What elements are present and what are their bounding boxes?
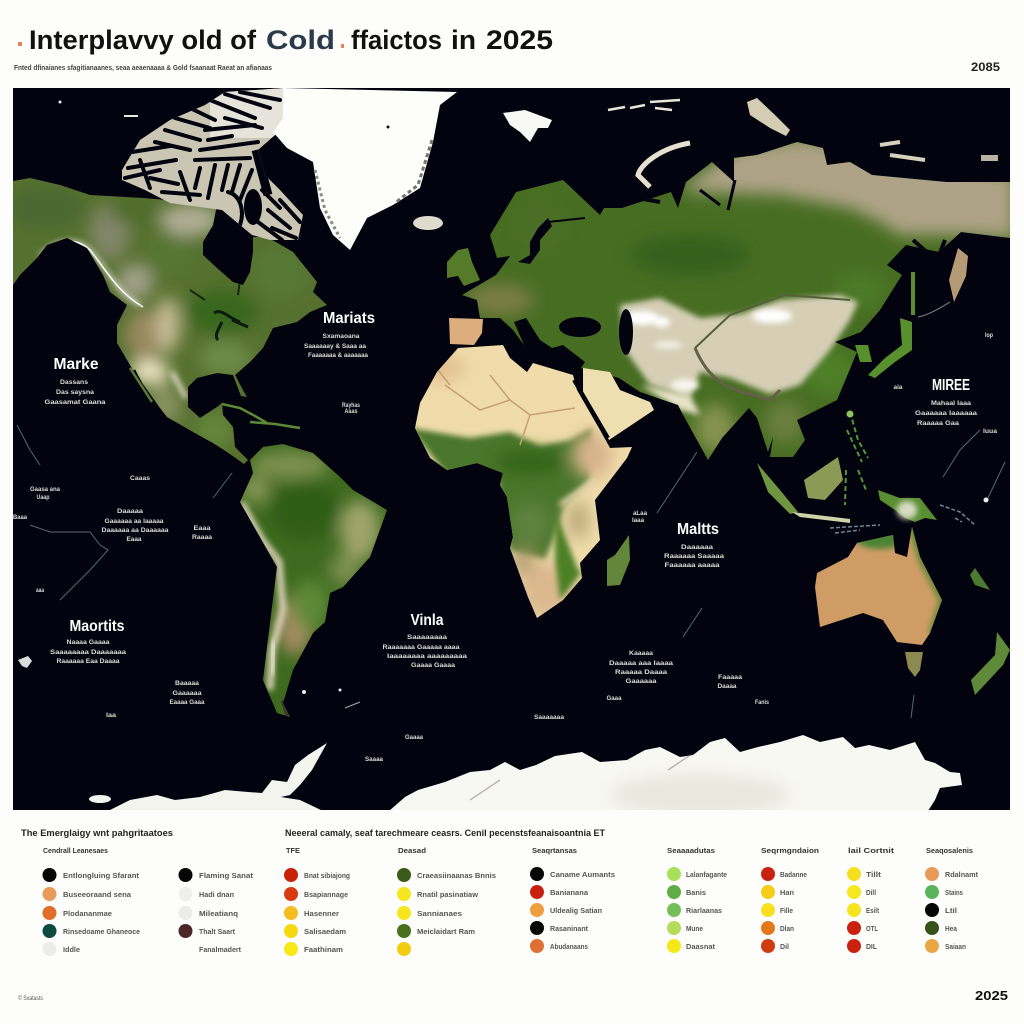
map label: maortits (50, 618, 126, 665)
map label: mariats (304, 310, 375, 359)
minor ocean labels (13, 332, 997, 763)
legend column 9: Seaqosalenis (926, 846, 973, 855)
minor ocean labels: Raaaaa Daaaa (615, 669, 667, 676)
map panel (5, 88, 1015, 817)
map label: maortits: Naaaa Gaaaa (66, 639, 110, 646)
arctic islands (124, 98, 998, 187)
iceland (413, 216, 443, 230)
legend column 3: Salisaedam (304, 927, 346, 936)
minor ocean labels: Saaaa (365, 756, 383, 763)
tasmania and new zealand (905, 568, 1010, 695)
legend column 5 (530, 846, 615, 953)
map label: marke: Marke (54, 356, 99, 373)
map label: vinla: Gaaaa Gaaaa (411, 662, 455, 669)
legend column 7: Dlan (780, 924, 794, 933)
minor ocean labels: Rayhas (342, 402, 360, 409)
minor ocean labels: Gaaaaaa aa Iaaaaa (104, 518, 164, 525)
legend column 1 (42, 846, 140, 956)
legend heading left: The Emerglaigy wnt pahgritaatoes (21, 828, 173, 839)
footer credit: © Sxatasts (18, 995, 43, 1002)
legend column 7: Dil (780, 942, 789, 951)
minor ocean labels: Iaaa (632, 517, 644, 524)
map label: maltts (664, 521, 724, 569)
minor ocean labels: Gaaaaaa (172, 690, 202, 697)
minor ocean labels: Kaaaaa (629, 650, 653, 657)
title: in (451, 25, 476, 55)
continent: australia (815, 527, 942, 645)
legend column 1: Entlongluing Sfarant (63, 871, 140, 880)
legend column 9: Saiaan (945, 942, 966, 951)
map label: maltts: Maltts (677, 521, 719, 538)
title: 2025 (486, 25, 553, 55)
southeast asia islands (757, 410, 975, 533)
legend column 9 (925, 846, 978, 953)
minor ocean labels: Daaaaaa aa Daaaaaa (102, 527, 169, 534)
legend column 2: Hadi dnan (199, 890, 234, 899)
legend column 8: OTL (866, 924, 878, 933)
minor ocean labels: Daaaaa (117, 508, 143, 515)
legend column 3: TFE (286, 846, 300, 855)
map label: mariats: Mariats (323, 310, 375, 327)
map label: vinla (382, 612, 467, 669)
subtitle: Fnted dfinaianes sfagitianaanes, seaa aeaenaaaa & Gold fsaanaat Raeat an afianaas (14, 65, 272, 72)
legend column 8: Tillt (866, 870, 882, 879)
greenland (273, 88, 457, 250)
minor ocean labels: aia (894, 384, 903, 391)
continent: north america (5, 170, 333, 470)
continent: south america (240, 444, 387, 717)
legend column 7: Fille (780, 906, 793, 915)
legend column 4: Meiclaidart Ram (417, 927, 475, 936)
legend column 9: Rdalnamt (945, 870, 978, 879)
legend column 3: Bnat sibiajong (304, 871, 350, 880)
title (18, 25, 553, 55)
legend column 7: Seqrmgndaion (761, 846, 819, 855)
legend column 9: Hea (945, 924, 958, 933)
minor ocean labels: Faaaaa (718, 674, 742, 681)
legend column 2 (178, 868, 254, 954)
legend column 8: DIL (866, 942, 877, 951)
map label: marke: Das saysna (56, 389, 94, 396)
legend column 1: Iddle (63, 945, 80, 954)
minor ocean labels: aaa (36, 587, 44, 594)
legend column 5: Seaqrtansas (532, 846, 577, 855)
legend column 5: Abudanaans (550, 942, 588, 951)
baja dark strip (133, 369, 143, 384)
continent: eurasia (450, 130, 1015, 470)
spain (449, 318, 483, 345)
minor ocean labels: Gaaa (606, 695, 622, 702)
minor ocean labels: Saaaaaaa (534, 714, 564, 721)
map label: miree: Gaaaaaa Iaaaaaa (915, 410, 977, 417)
legend column 3: Hasenner (304, 909, 339, 918)
legend column 4: Rnatil pasinatiaw (417, 890, 478, 899)
legend column 1: Plodananmae (63, 909, 112, 918)
legend column 8: Esilt (866, 906, 879, 915)
minor ocean labels: Iop (985, 332, 993, 339)
pacific and ocean island chains (17, 100, 1005, 718)
minor ocean labels: Iaa (106, 712, 116, 719)
continent: africa (410, 340, 640, 625)
legend column 6: Mune (686, 924, 703, 933)
legend column 6: Banis (686, 888, 706, 897)
map label: vinla: Vinla (410, 612, 444, 629)
legend column 7 (761, 846, 819, 953)
minor ocean labels: Raaaa (192, 534, 212, 541)
map label: miree: MIREE (932, 377, 970, 394)
minor ocean labels: aLaa (633, 510, 647, 517)
minor ocean labels: Eaaa (126, 536, 142, 543)
title: Cold (266, 25, 335, 55)
legend column 9: Ltil (945, 906, 957, 915)
map label: marke: Gaasamat Gaana (44, 399, 106, 406)
legend column 6: Seaaaadutas (667, 846, 715, 855)
red sea edge (574, 380, 608, 438)
minor ocean labels: Gaaaaaa (626, 678, 657, 685)
legend column 4: Deasad (398, 846, 426, 855)
legend column 9: Stains (945, 888, 963, 897)
minor ocean labels: luua (983, 428, 997, 435)
minor ocean labels: Aaas (344, 408, 358, 415)
minor ocean labels: Baaaaa (175, 680, 199, 687)
legend column 1: Cendrall Leanesaes (43, 846, 108, 855)
map label: marke (44, 356, 106, 406)
legend column 2: Thalt Saart (199, 927, 235, 936)
legend column 7: Han (780, 888, 794, 897)
legend column 5: Rasaninant (550, 924, 588, 933)
legend column 8: lail Cortnit (848, 846, 895, 855)
kamchatka (949, 248, 968, 302)
legend column 4 (397, 846, 496, 956)
continent: antarctica (89, 735, 962, 810)
legend column 7: Badanne (780, 870, 807, 879)
map label: miree: Mahaal Iaaa (931, 400, 971, 407)
legend column 2: Flaming Sanat (199, 871, 254, 880)
arabia (583, 368, 654, 440)
japan korea sakhalin (855, 272, 950, 378)
minor ocean labels: Gaasa ana (30, 486, 60, 493)
minor ocean labels: Daaaaa aaa Iaaaa (609, 660, 673, 667)
map label: maortits: Saaaaaaaa Daaaaaaa (50, 649, 126, 656)
map label: marke: Dassans (60, 379, 88, 386)
minor ocean labels: Caaas (130, 475, 150, 482)
legend column 6: Riarlaanas (686, 906, 722, 915)
minor ocean labels: Eaaa (194, 525, 211, 532)
legend column 2: Fanalmadert (199, 945, 241, 954)
map label: vinla: Saaaaaaaa (407, 634, 447, 641)
caribbean islands (222, 404, 300, 428)
minor ocean labels: Baaa (13, 514, 27, 521)
map label: miree (915, 377, 977, 427)
madagascar (607, 535, 630, 586)
minor ocean labels: Gaaaa (405, 734, 423, 741)
map label: mariats: Sxamaoana (322, 333, 360, 340)
legend column 8 (847, 846, 895, 953)
map label: maortits: Maortits (70, 618, 125, 635)
map label: vinla: Raaaaaaa Gaaaaa aaaa (382, 644, 460, 651)
minor ocean labels: Uaap (36, 494, 50, 501)
legend column 3: Faathinam (304, 945, 343, 954)
footer year: 2025 (975, 988, 1008, 1003)
legend column 5: Banianana (550, 888, 589, 897)
legend column 1: Rinsedoame Ghaneoce (63, 927, 140, 936)
map label: maltts: Raaaaaa Saaaaa (664, 553, 724, 560)
legend column 8: Dill (866, 888, 876, 897)
minor ocean labels: Fanis (755, 699, 769, 706)
minor ocean labels: Daaaa (718, 683, 737, 690)
map label: maltts: Daaaaaa (681, 544, 713, 551)
legend column 3 (284, 846, 350, 956)
legend column 5: Uldealig Satian (550, 906, 602, 915)
minor ocean labels: Eaaaa Gaaa (170, 699, 205, 706)
legend column 4: Craeasiinaanas Bnnis (417, 871, 496, 880)
legend column 3: Bsapiannage (304, 890, 348, 899)
legend column 2: Mileatianq (199, 909, 238, 918)
year top right: 2085 (971, 62, 1001, 74)
map label: miree: Raaaaa Gaa (917, 420, 959, 427)
title: ffaictos (351, 25, 442, 55)
map label: maltts: Faaaaaa aaaaa (664, 562, 720, 569)
legend column 6: Lalanfagante (686, 870, 727, 879)
legend column 5: Caname Aumants (550, 870, 615, 879)
title: Interplavvy old of (29, 25, 257, 55)
legend column 1: Buseeoraand sena (63, 890, 132, 899)
legend heading right: Neeeral camaly, seaf tarechmeare ceasrs. Cenil pecenstsfeanaisoantnia ET (285, 828, 605, 839)
map label: mariats: Saaaaaay & Saaa aa (304, 343, 366, 350)
map label: vinla: Iaaaaaaaa aaaaaaaaa (387, 653, 467, 660)
map label: maortits: Raaaaaa Eaa Daaaa (56, 658, 120, 665)
legend column 6: Daasnat (686, 942, 715, 951)
map label: mariats: Faaaaaaa & aaaaaaa (308, 352, 368, 359)
legend column 6 (667, 846, 727, 953)
arctic archipelago (120, 88, 310, 243)
ireland britain (447, 248, 480, 286)
legend column 4: Sannianaes (417, 909, 462, 918)
